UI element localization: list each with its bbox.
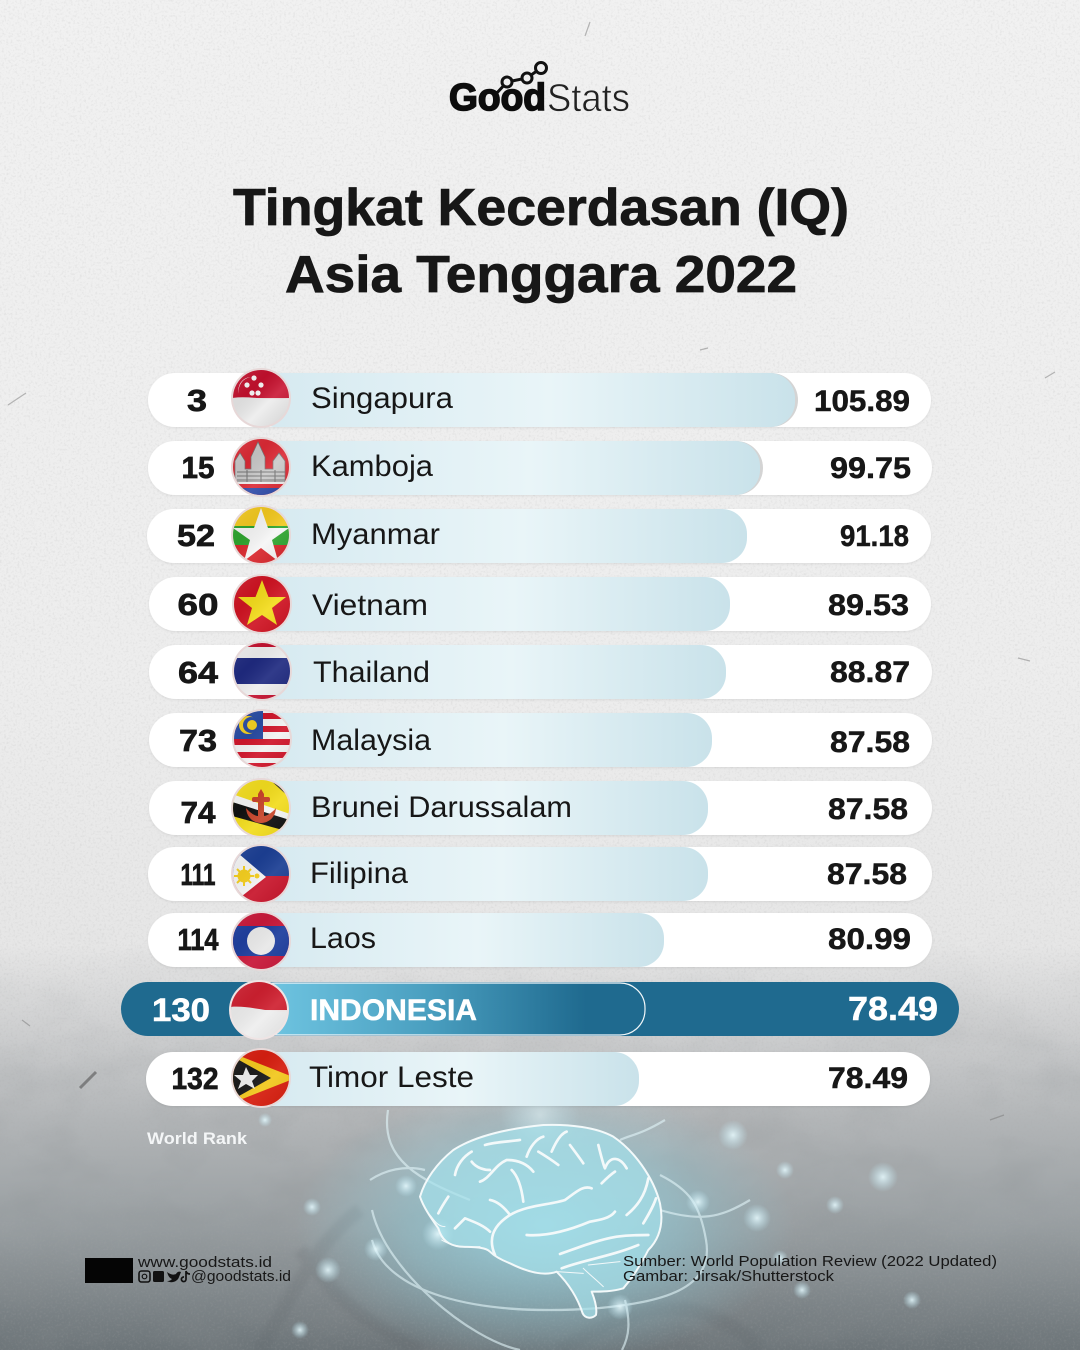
logo: GoodStats (449, 62, 630, 120)
footer: website and social handles: www.goodstats.id (137, 1254, 272, 1271)
row: Indonesia (highlighted): 130 (152, 992, 210, 1028)
flag: Malaysia (232, 709, 292, 769)
title: Asia Tenggara 2022 (285, 246, 797, 304)
row: Malaysia (149, 709, 932, 769)
flag: Myanmar (231, 505, 291, 565)
icons: social media (139, 1271, 190, 1282)
row: Brunei Darussalam: Brunei Darussalam (311, 791, 572, 824)
brain illustration (258, 1075, 921, 1350)
row: Vietnam: 60 (178, 587, 218, 622)
row: Malaysia: Malaysia (311, 724, 431, 757)
glow dots (258, 1113, 921, 1339)
footer: website and social handles: @goodstats.id (191, 1268, 291, 1285)
row: Timor Leste: 132 (172, 1061, 218, 1096)
row: Thailand (149, 641, 932, 701)
footer: source credits (623, 1253, 997, 1285)
title: Tingkat Kecerdasan (IQ) (233, 179, 849, 237)
flag: Timor Leste (231, 1048, 291, 1108)
row: Singapura (148, 368, 931, 428)
row: Filipina: Filipina (310, 857, 408, 890)
flag: Brunei (231, 778, 291, 838)
flag: Cambodia (231, 437, 291, 497)
row: Brunei Darussalam: 87.58 (828, 793, 908, 826)
row: Kamboja: 99.75 (830, 452, 911, 485)
row: Kamboja (148, 437, 932, 497)
row: Thailand: 64 (178, 655, 219, 690)
row: Singapura: 3 (187, 383, 207, 418)
row: Malaysia: 87.58 (830, 726, 910, 759)
row: Indonesia (highlighted) (121, 980, 959, 1040)
footer: website and social handles (85, 1254, 291, 1285)
logo: GoodStats: Stats (547, 77, 630, 120)
row: Myanmar: 91.18 (840, 520, 909, 553)
row: Thailand: 88.87 (830, 656, 910, 689)
row: Myanmar (147, 505, 931, 565)
flag: Philippines (231, 844, 291, 904)
flag: Laos (231, 911, 291, 971)
panel: ranking rows (121, 368, 959, 1108)
footer: source credits: Sumber: World Population Review (2022 Updated) (623, 1253, 997, 1270)
row: Timor Leste (146, 1048, 930, 1108)
row: Laos (148, 911, 932, 971)
row: Thailand: Thailand (313, 656, 430, 689)
footer: source credits: Gambar: Jirsak/Shutterstock (623, 1268, 835, 1285)
row: Vietnam: Vietnam (312, 589, 428, 622)
row: Singapura: Singapura (311, 382, 453, 415)
row: Filipina: 111 (180, 857, 216, 892)
flag: Singapore (231, 368, 291, 428)
row: Laos: 80.99 (828, 923, 911, 956)
row: Timor Leste: 78.49 (828, 1062, 908, 1095)
row: Myanmar: Myanmar (311, 518, 440, 551)
flag: Vietnam (232, 574, 292, 634)
row: Indonesia (highlighted): INDONESIA (310, 994, 477, 1027)
world rank label: World Rank (147, 1129, 248, 1148)
row: Filipina: 87.58 (827, 858, 907, 891)
row: Filipina (148, 844, 932, 904)
row: Vietnam (149, 574, 931, 634)
row: Singapura: 105.89 (814, 385, 910, 418)
row: Timor Leste: Timor Leste (309, 1061, 474, 1094)
row: Indonesia (highlighted): 78.49 (848, 990, 938, 1027)
icon: logo trend line (495, 62, 546, 95)
flag: Indonesia (229, 980, 289, 1040)
row: Kamboja: Kamboja (311, 450, 433, 483)
row: Brunei Darussalam: 74 (180, 795, 216, 830)
logo: GoodStats: Good (449, 77, 546, 119)
row: Laos: Laos (310, 922, 376, 955)
brain outline (420, 1125, 661, 1318)
orbit lines (370, 1110, 750, 1350)
row: Kamboja: 15 (182, 450, 214, 485)
title (233, 179, 849, 304)
row: Malaysia: 73 (179, 723, 217, 758)
flag: Thailand (232, 641, 292, 701)
row: Myanmar: 52 (177, 518, 215, 553)
row: Vietnam: 89.53 (828, 589, 909, 622)
row: Laos: 114 (178, 922, 219, 957)
row: Brunei Darussalam (149, 778, 932, 838)
